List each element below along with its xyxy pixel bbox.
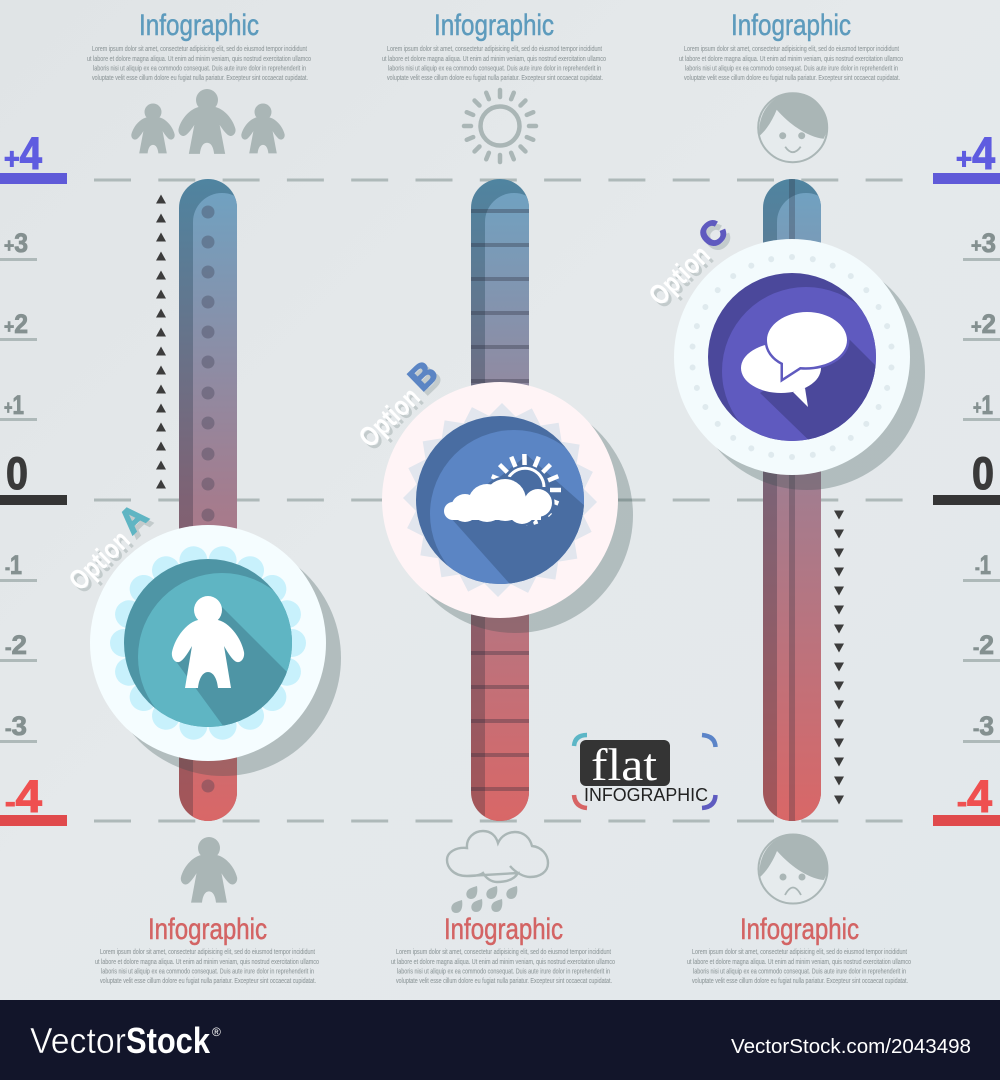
icon: person: [172, 596, 244, 688]
heading block: bottom C: Lorem ipsum dolor sit amet, consectetur adipisicing elit, sed do eiusmod tempor incididunt: [692, 949, 907, 956]
heading block: bottom B: voluptate velit esse cillum dolore eu fugiat nulla pariatur. Excepteur sint occaecat cupidatat.: [396, 978, 612, 985]
label: option B: B: [401, 354, 445, 398]
scallop ring: [110, 544, 306, 742]
footer logo: [30, 1020, 221, 1061]
footer id: VectorStock.com/2043498: [731, 1036, 971, 1058]
label: option A: A: [115, 501, 159, 545]
heading block: bottom A: [95, 913, 319, 985]
bar B: [471, 179, 529, 821]
scale +4: +4: [4, 128, 42, 179]
heading block: bottom C: laboris nisi ut aliquip ex ea commodo consequat. Duis aute irure dolor in reprehenderit in: [693, 968, 906, 976]
scale 0: 0: [6, 448, 28, 499]
down arrows: [834, 510, 844, 804]
panel: option C circle: [674, 239, 925, 490]
label: option B: B: [405, 358, 449, 402]
heading block: bottom A: laboris nisi ut aliquip ex ea commodo consequat. Duis aute irure dolor in reprehenderit in: [101, 968, 314, 976]
right scale +4: [933, 128, 1000, 184]
footer logo: Stock: [126, 1020, 211, 1061]
right scale -1: -1: [975, 550, 991, 580]
heading block: top C: laboris nisi ut aliquip ex ea commodo consequat. Duis aute irure dolor in reprehenderit in: [685, 66, 898, 72]
label: option A: A: [111, 497, 155, 541]
scale +3: +3: [4, 228, 28, 258]
right scale +3: +3: [971, 228, 996, 258]
label: option C: Option: [646, 242, 719, 314]
heading block: top C: Infographic: [731, 9, 851, 42]
heading block: top C: Lorem ipsum dolor sit amet, consectetur adipisicing elit, sed do eiusmod tempor incididunt: [684, 46, 899, 53]
heading block: top B: ut labore et dolore magna aliqua. Ut enim ad minim veniam, quis nostrud exercitation ullamco: [382, 56, 606, 63]
heading block: top A: voluptate velit esse cillum dolore eu fugiat nulla pariatur. Excepteur sint occaecat cupidatat.: [92, 75, 308, 82]
logo: flat infographic: [574, 735, 716, 808]
heading block: bottom B: ut labore et dolore magna aliqua. Ut enim ad minim veniam, quis nostrud exercitation ullamco: [391, 959, 615, 966]
right scale +2: [963, 309, 1000, 341]
heading block: bottom A: Infographic: [148, 913, 267, 946]
scale -3: -3: [5, 711, 27, 741]
scale -3: [0, 711, 37, 743]
scale -2: -2: [5, 630, 27, 660]
heading block: bottom C: ut labore et dolore magna aliqua. Ut enim ad minim veniam, quis nostrud exercitation ullamco: [687, 959, 911, 966]
dotted ring: [689, 254, 895, 460]
heading block: bottom C: Infographic: [740, 913, 859, 946]
bar C: [763, 179, 821, 821]
scale -4: [0, 771, 67, 826]
panel: option B circle: [382, 382, 633, 640]
star ring: [402, 402, 598, 598]
scale +3: [0, 228, 37, 261]
footer bar: [0, 1000, 1000, 1080]
footer logo: Vector: [30, 1020, 126, 1061]
heading block: top C: [679, 9, 903, 82]
icon: rain cloud: [447, 831, 548, 913]
heading block: bottom C: [687, 913, 911, 985]
icon: sad face: [758, 834, 828, 904]
scale +1: +1: [4, 390, 24, 420]
scale -1: -1: [5, 550, 22, 580]
up arrows: [156, 194, 166, 488]
heading block: top B: voluptate velit esse cillum dolore eu fugiat nulla pariatur. Excepteur sint occaecat cupidatat.: [387, 75, 603, 82]
bar B ticks: [471, 209, 529, 791]
heading block: top A: Infographic: [139, 9, 259, 42]
icon: speech bubbles: [741, 312, 847, 407]
scale -2: [0, 630, 37, 662]
right scale +1: [963, 390, 1000, 421]
label: option B: Option: [356, 384, 429, 456]
icon: sun: [464, 90, 536, 162]
right scale +3: [963, 228, 1000, 261]
right scale -1: [963, 550, 1000, 582]
right scale -2: [963, 630, 1000, 662]
heading block: bottom B: Lorem ipsum dolor sit amet, consectetur adipisicing elit, sed do eiusmod tempor incididunt: [396, 949, 611, 956]
heading block: top A: ut labore et dolore magna aliqua. Ut enim ad minim veniam, quis nostrud exercitation ullamco: [87, 56, 311, 63]
heading block: bottom A: Lorem ipsum dolor sit amet, consectetur adipisicing elit, sed do eiusmod tempor incididunt: [100, 949, 315, 956]
right scale -4: -4: [957, 771, 992, 822]
heading block: top B: Lorem ipsum dolor sit amet, consectetur adipisicing elit, sed do eiusmod tempor incididunt: [387, 46, 602, 53]
heading block: bottom A: voluptate velit esse cillum dolore eu fugiat nulla pariatur. Excepteur sint occaecat cupidatat.: [100, 978, 316, 985]
right scale 0: [933, 448, 1000, 505]
scale -1: [0, 550, 37, 582]
heading block: bottom B: [391, 913, 615, 985]
right scale -3: [963, 711, 1000, 743]
panel: option A circle: [90, 525, 341, 790]
heading block: top A: laboris nisi ut aliquip ex ea commodo consequat. Duis aute irure dolor in reprehenderit in: [93, 66, 306, 72]
right scale 0: 0: [972, 448, 994, 499]
heading block: top A: [87, 9, 311, 82]
right scale +4: +4: [956, 128, 995, 179]
scale +1: [0, 390, 37, 421]
icon: family of three: [131, 89, 285, 154]
heading block: top C: voluptate velit esse cillum dolore eu fugiat nulla pariatur. Excepteur sint occaecat cupidatat.: [684, 75, 900, 82]
icon: sun behind cloud: [444, 454, 561, 526]
right scale -2: -2: [973, 630, 994, 660]
heading block: top B: Infographic: [434, 9, 554, 42]
label: option C: C: [691, 212, 735, 256]
bar C centre stripe: [789, 179, 795, 821]
scale +4: [0, 128, 67, 184]
scale -4: -4: [5, 771, 42, 822]
label: option B: Option: [353, 381, 426, 453]
label: option A: Option: [66, 527, 139, 599]
heading block: bottom B: Infographic: [444, 913, 563, 946]
heading block: top B: laboris nisi ut aliquip ex ea commodo consequat. Duis aute irure dolor in reprehenderit in: [388, 66, 601, 72]
label: option C: Option: [643, 239, 716, 311]
heading block: bottom C: voluptate velit esse cillum dolore eu fugiat nulla pariatur. Excepteur sint occaecat cupidatat.: [692, 978, 908, 985]
scale +2: [0, 309, 37, 341]
right scale -4: [933, 771, 1000, 826]
label: option C: C: [695, 216, 739, 260]
icon: happy face: [758, 93, 827, 162]
heading block: top B: [382, 9, 606, 82]
footer logo: ®: [212, 1025, 221, 1039]
left scale: [0, 128, 67, 826]
right scale -3: -3: [973, 711, 994, 741]
heading block: top C: ut labore et dolore magna aliqua. Ut enim ad minim veniam, quis nostrud exercitation ullamco: [679, 56, 903, 63]
icon: single person: [181, 837, 237, 903]
right scale +1: +1: [973, 390, 993, 420]
logo: flat infographic: flat: [591, 739, 657, 790]
right scale: [933, 128, 1000, 826]
scale +2: +2: [4, 309, 28, 339]
heading block: bottom B: laboris nisi ut aliquip ex ea commodo consequat. Duis aute irure dolor in reprehenderit in: [397, 968, 610, 976]
bar A: [179, 179, 237, 821]
right scale +2: +2: [971, 309, 996, 339]
label: option A: Option: [63, 524, 136, 596]
logo: flat infographic: INFOGRAPHIC: [584, 785, 708, 805]
scale 0: [0, 448, 67, 505]
heading block: top A: Lorem ipsum dolor sit amet, consectetur adipisicing elit, sed do eiusmod tempor incididunt: [92, 46, 307, 53]
heading block: bottom A: ut labore et dolore magna aliqua. Ut enim ad minim veniam, quis nostrud exercitation ullamco: [95, 959, 319, 966]
bar A dots: [202, 206, 214, 792]
